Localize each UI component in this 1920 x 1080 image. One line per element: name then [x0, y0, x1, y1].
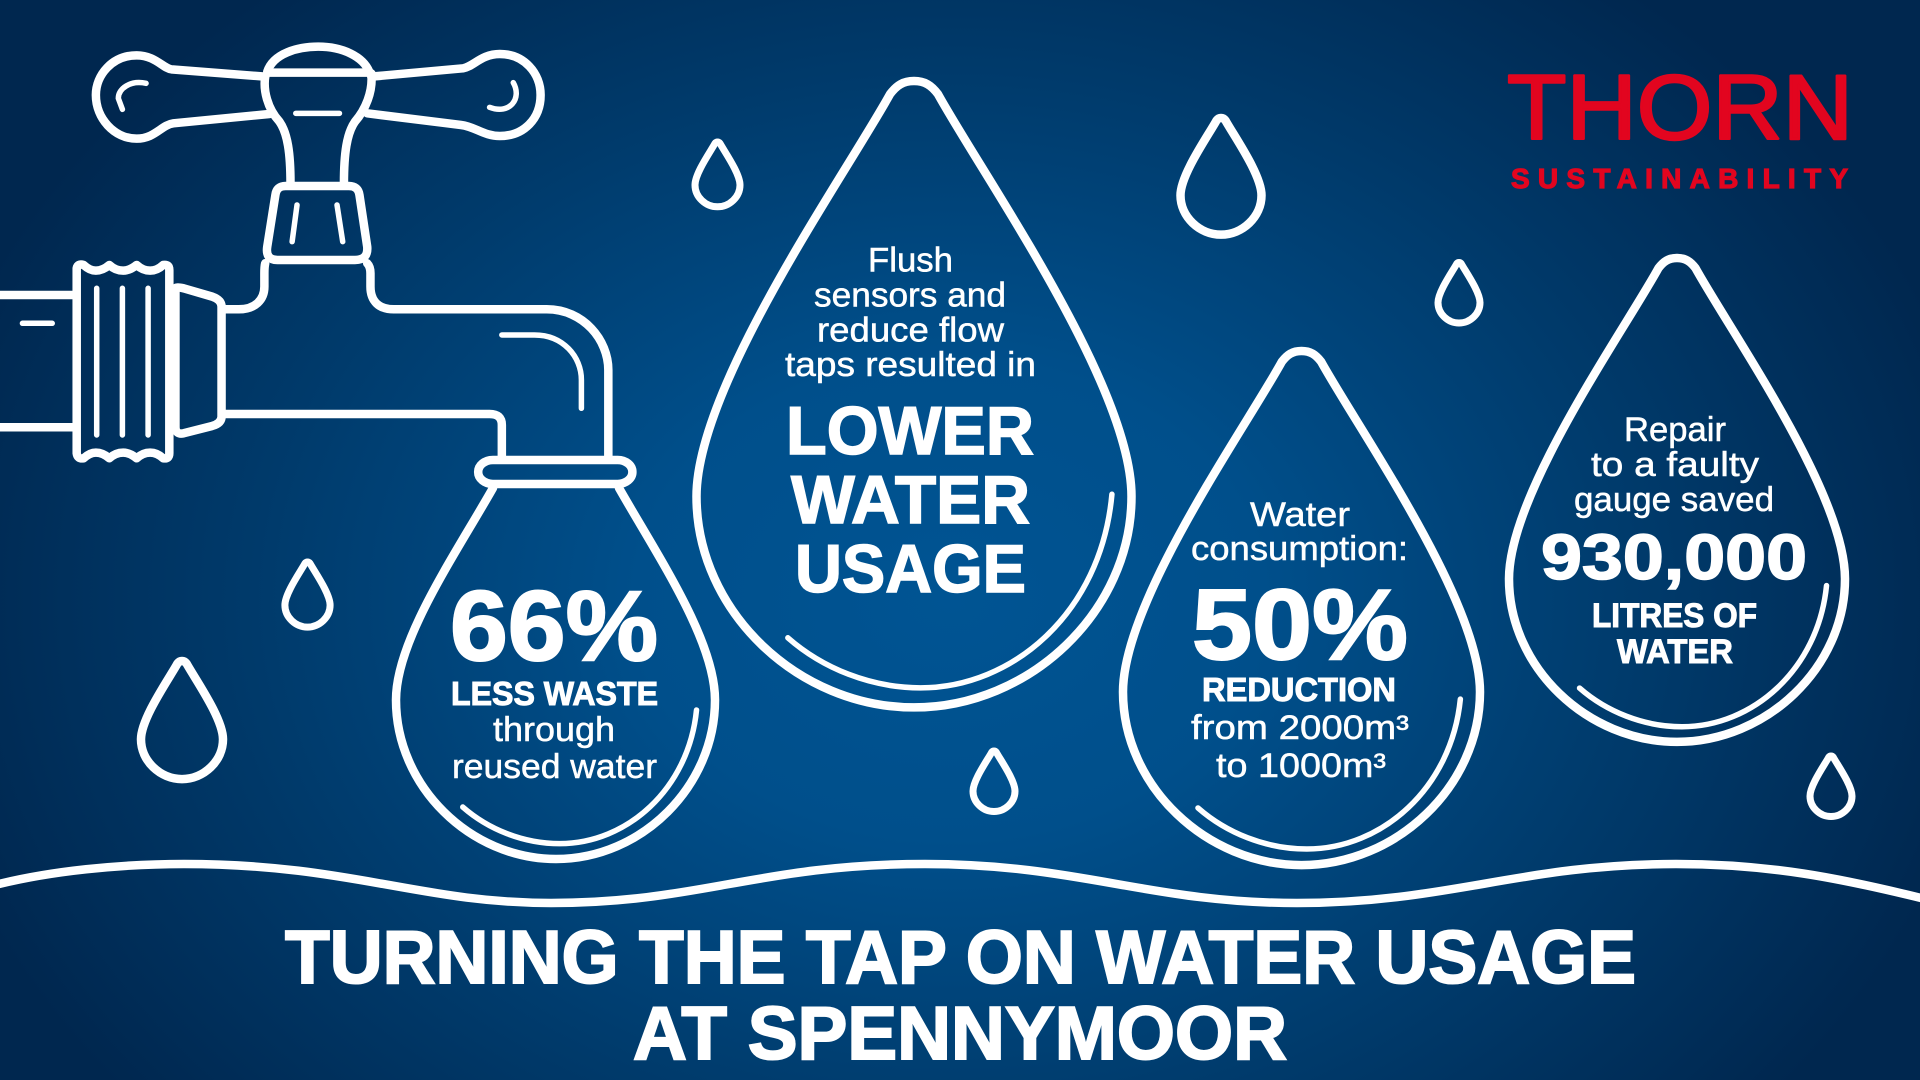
- heading: lower water usage: LOWER: [786, 393, 1034, 469]
- logo tagline: SUSTAINABILITY: [1511, 163, 1848, 194]
- stat: 930,000: 930,000: [1541, 521, 1807, 593]
- logo: Thorn Sustainability: [1507, 57, 1853, 194]
- text: from 2000m3 to 1000m3: from 2000m³: [1191, 709, 1409, 747]
- heading: lower water usage: [786, 393, 1034, 607]
- label: less waste: LESS WASTE: [451, 675, 658, 712]
- hex nut: [175, 287, 222, 434]
- heading: lower water usage: USAGE: [795, 531, 1026, 607]
- text: repair to a faulty gauge: gauge saved: [1574, 481, 1774, 519]
- panel: 50% reduction drop: [1123, 351, 1480, 865]
- water surface wave: [0, 864, 1920, 903]
- tap body and spout: [222, 263, 608, 458]
- panel: 930,000 litres drop: [1509, 258, 1845, 742]
- inlet pipe: [0, 295, 75, 427]
- drop outline: [1123, 351, 1480, 865]
- text: water consumption: consumption:: [1191, 530, 1408, 568]
- drop highlight: [1580, 586, 1827, 727]
- drop highlight: [463, 710, 697, 844]
- text: flush sensors: Flush: [868, 242, 953, 280]
- icon: small drop bottom right: [1810, 756, 1852, 816]
- drop outline: [396, 488, 715, 859]
- drop highlight: [788, 494, 1112, 688]
- text: from 2000m3 to 1000m3: to 1000m³: [1216, 747, 1386, 785]
- icon: small drop near main drop: [695, 142, 740, 207]
- panel: lower water usage drop: [696, 81, 1132, 707]
- icon: small drop top right: [1438, 262, 1480, 323]
- icon: large drop top centre: [1180, 118, 1262, 235]
- text: through reused water: reused water: [452, 748, 657, 786]
- icon: small drop left: [285, 562, 330, 627]
- text: from 2000m3 to 1000m3: [1191, 709, 1409, 785]
- logo wordmark: THORN: [1507, 57, 1853, 159]
- text: through reused water: through: [493, 711, 615, 749]
- panel: 66% less waste drop: [396, 488, 715, 859]
- drop highlight: [1198, 699, 1460, 849]
- icon: small drop centre bottom: [973, 751, 1015, 811]
- title: TURNING THE TAP ON WATER USAGE: [285, 915, 1636, 999]
- label: litres of water: WATER: [1617, 633, 1733, 671]
- drop outline: [1509, 258, 1845, 742]
- label: litres of water: [1592, 597, 1757, 671]
- threaded pipe coupling: [77, 265, 169, 458]
- text: flush sensors: taps resulted in: [785, 346, 1036, 384]
- icon: tap: [0, 47, 632, 484]
- text: repair to a faulty gauge: Repair: [1624, 411, 1726, 449]
- text: water consumption: [1191, 496, 1408, 568]
- text: repair to a faulty gauge: [1574, 411, 1774, 519]
- drop outline: [696, 81, 1132, 707]
- icon: large drop left: [141, 661, 223, 779]
- label: litres of water: LITRES OF: [1592, 597, 1757, 635]
- tap handle: [96, 47, 541, 183]
- label: reduction: REDUCTION: [1202, 671, 1396, 708]
- text: flush sensors: [785, 242, 1036, 384]
- spout ring: [478, 460, 632, 484]
- title: AT SPENNYMOOR: [633, 991, 1287, 1075]
- text: water consumption: Water: [1250, 496, 1350, 534]
- heading: lower water usage: WATER: [791, 462, 1030, 538]
- text: repair to a faulty gauge: to a faulty: [1591, 446, 1759, 484]
- text: through reused water: [452, 711, 657, 786]
- stat: 66%: 66%: [450, 570, 658, 681]
- tap collar: [267, 186, 367, 260]
- title: [285, 915, 1636, 1075]
- stat: 50%: 50%: [1192, 569, 1408, 681]
- text: flush sensors: sensors and: [814, 276, 1006, 314]
- text: flush sensors: reduce flow: [817, 312, 1004, 350]
